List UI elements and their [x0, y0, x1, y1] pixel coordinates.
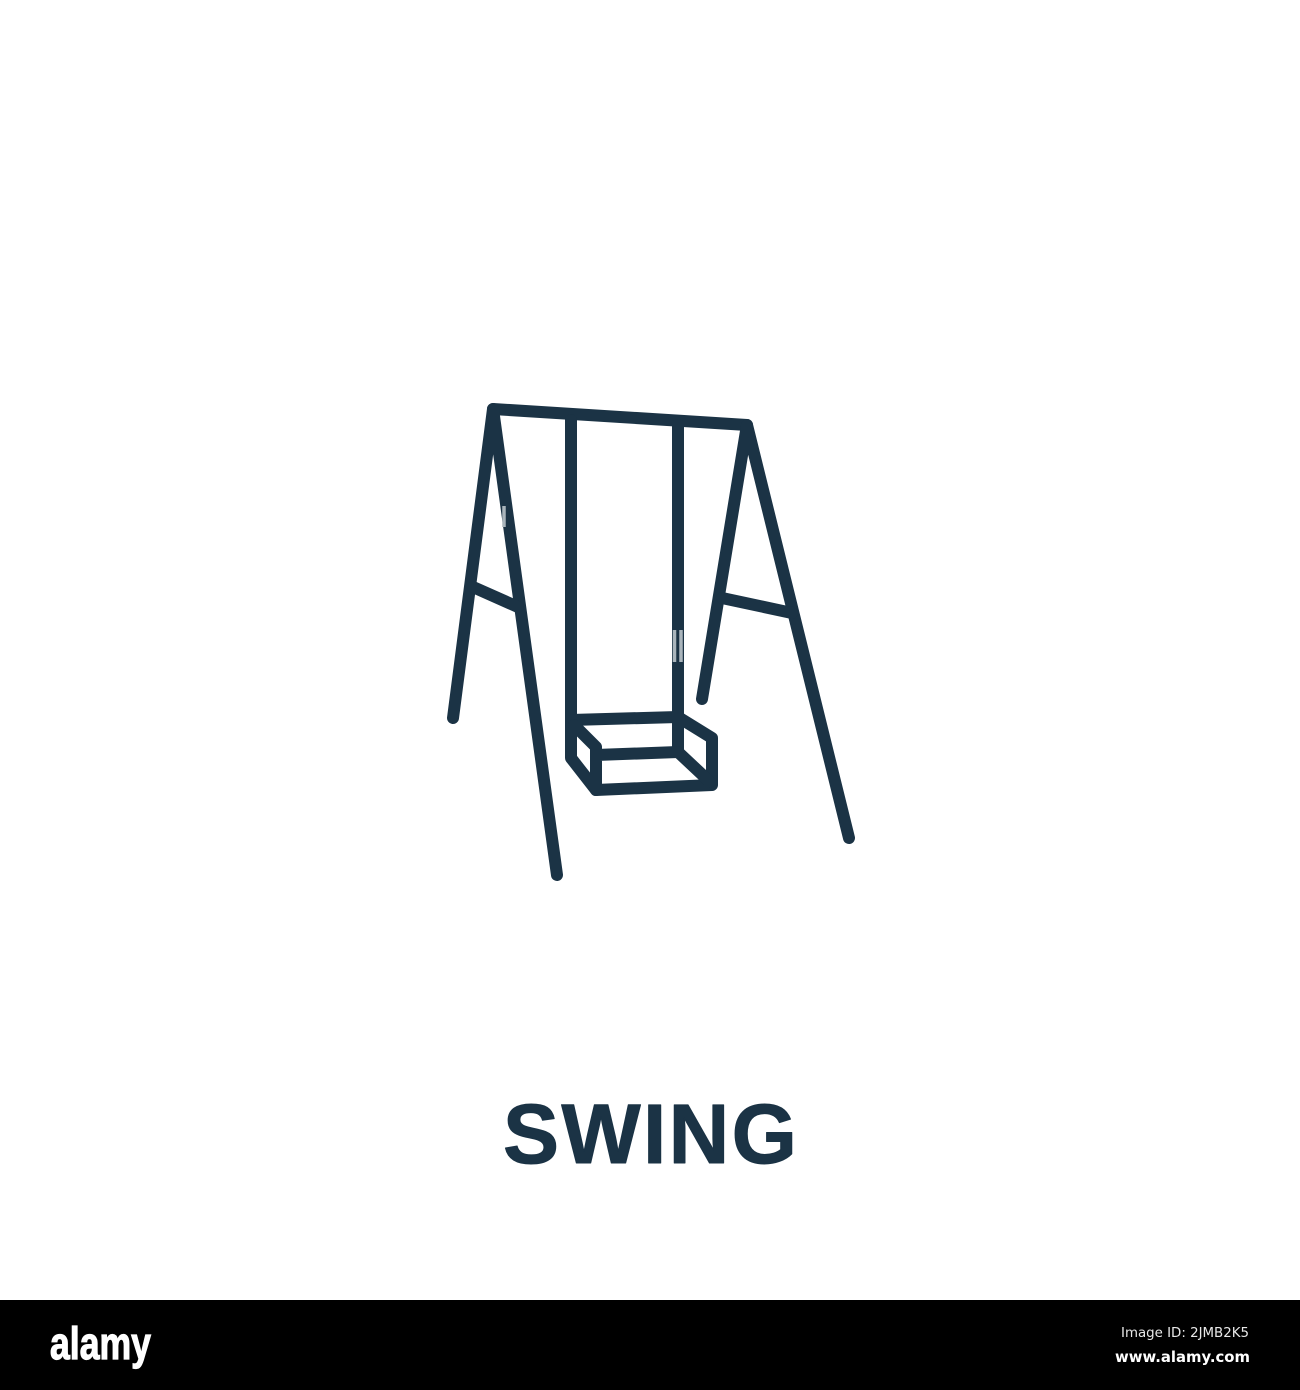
right cross brace: [722, 598, 792, 613]
footer bar: [0, 1300, 1300, 1390]
seat and left rope: [571, 420, 712, 790]
image id: Image ID: 2JMB2K5: [1121, 1325, 1249, 1341]
top bar: [493, 409, 747, 425]
right frame legs: [702, 425, 849, 838]
website: www.alamy.com: [1115, 1348, 1250, 1366]
logo: alamy: alamy: [50, 1318, 151, 1369]
seat inner lines: [574, 725, 710, 790]
right rope: [672, 425, 684, 752]
icon: swing set: [453, 409, 849, 875]
watermark fragments: [504, 506, 681, 662]
left frame legs: [453, 409, 557, 875]
title: SWING: [503, 1087, 797, 1181]
left cross brace: [473, 587, 518, 607]
